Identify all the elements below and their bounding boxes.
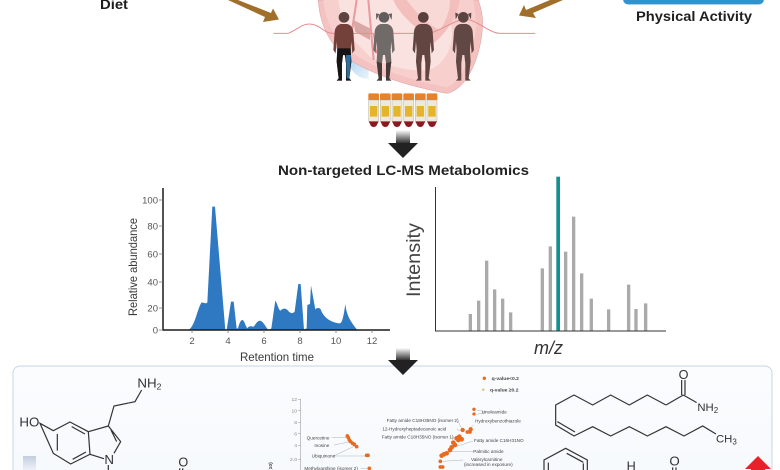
volcano tick labels: 10 bbox=[291, 408, 297, 414]
volcano legend: q-value<0.2 bbox=[492, 376, 519, 382]
spectrum axes bbox=[436, 187, 666, 331]
volcano labels: Valerylcarnitine bbox=[471, 457, 503, 462]
molecule: fatty amide: CH bbox=[716, 434, 732, 446]
heart bbox=[318, 0, 483, 93]
child 4 bbox=[453, 12, 474, 81]
volcano labels: Inosine bbox=[314, 443, 330, 448]
icon: gradient square bbox=[23, 456, 36, 470]
chart: mass spectrum bbox=[404, 177, 666, 358]
molecule: benzene ring fragment: O bbox=[669, 453, 680, 468]
title: Non-targeted LC-MS Metabolomics: Non-targeted LC-MS Metabolomics bbox=[278, 162, 529, 178]
x tick labels: 8 bbox=[297, 336, 303, 347]
volcano tick labels: 8 bbox=[294, 420, 297, 426]
volcano labels: Fatty amide C18H35NO (isomer 1) bbox=[382, 435, 454, 440]
icon: physical activity bar bbox=[623, 0, 764, 4]
volcano labels: Linoleamide bbox=[482, 409, 507, 414]
molecule: fatty amide bbox=[556, 368, 737, 447]
y axis title: Relative abundance bbox=[126, 218, 140, 316]
x tick labels bbox=[189, 336, 377, 347]
chromatogram axes bbox=[163, 188, 390, 330]
volcano labels: Hydroxybenzothiazole bbox=[475, 419, 521, 424]
volcano leader lines bbox=[332, 410, 487, 468]
x axis title: Retention time bbox=[240, 350, 314, 364]
volcano tick labels: 12 bbox=[291, 397, 297, 403]
x axis title: m/z bbox=[534, 338, 563, 358]
volcano tick labels: 6 bbox=[294, 431, 297, 437]
chart: volcano plot bbox=[268, 376, 524, 470]
volcano tick labels bbox=[290, 397, 297, 463]
volcano legend bbox=[482, 376, 519, 393]
y tick labels: 20 bbox=[147, 304, 158, 314]
arrow: diet to children bbox=[228, 0, 279, 22]
volcano labels: Ubiquinone bbox=[312, 454, 336, 459]
y tick labels: 0 bbox=[153, 326, 158, 336]
molecule: fatty amide: 2 bbox=[714, 406, 719, 415]
heading: Physical Activity: Physical Activity bbox=[636, 9, 753, 24]
y tick labels: 80 bbox=[147, 222, 158, 232]
volcano tick labels: 2.0 bbox=[290, 457, 297, 463]
chromatogram peaks bbox=[188, 207, 363, 330]
volcano labels: 12-Hydroxyheptadecanoic acid bbox=[382, 427, 447, 432]
arrow: chart to metabolites bbox=[388, 348, 418, 375]
y tick labels: 100 bbox=[142, 196, 158, 206]
blue patch behind heart bbox=[346, 55, 369, 79]
y axis title: Intensity bbox=[404, 222, 425, 297]
molecule: serotonin: NH bbox=[137, 375, 157, 390]
child 3 bbox=[413, 12, 434, 81]
x tick labels: 12 bbox=[367, 336, 377, 347]
child 1 bbox=[333, 12, 355, 81]
volcano points bbox=[345, 408, 476, 470]
x tick labels: 4 bbox=[225, 336, 231, 347]
molecule: fatty amide: O bbox=[679, 368, 689, 382]
molecule: serotonin: O bbox=[178, 456, 188, 470]
molecule: benzene ring fragment bbox=[544, 448, 680, 470]
arrow: tubes to LC-MS bbox=[388, 130, 418, 158]
illustration: heart with children bbox=[273, 0, 535, 93]
panel: metabolites bbox=[13, 366, 772, 470]
molecule: fatty amide: NH bbox=[697, 402, 714, 414]
volcano labels: Fatty amide C18H35NO (isomer 2) bbox=[387, 418, 459, 423]
y tick labels bbox=[142, 196, 158, 336]
child 2 bbox=[373, 12, 395, 81]
x tick labels: 10 bbox=[331, 336, 341, 347]
molecule: serotonin: N bbox=[104, 452, 114, 467]
ECG line bbox=[273, 19, 535, 53]
icon: sample tubes bbox=[368, 93, 437, 127]
volcano labels: Palmitic amide bbox=[473, 449, 504, 454]
volcano labels: Quercetine bbox=[307, 435, 330, 440]
x tick labels: 6 bbox=[261, 336, 267, 347]
molecule: serotonin bbox=[19, 375, 188, 470]
volcano axis bbox=[298, 399, 301, 470]
volcano labels: Fatty amide C16H31NO bbox=[474, 438, 524, 443]
spectrum bars bbox=[469, 177, 647, 331]
icon: red up arrow bbox=[745, 456, 771, 470]
volcano labels: (increased in exposure) bbox=[464, 462, 513, 467]
y tick labels: 40 bbox=[147, 278, 158, 288]
volcano tick labels: 4 bbox=[294, 443, 297, 449]
molecule: serotonin: HO bbox=[19, 415, 39, 430]
volcano legend: q-value ≥0.2 bbox=[490, 387, 519, 393]
volcano labels bbox=[304, 409, 524, 470]
x tick labels: 2 bbox=[189, 336, 195, 347]
molecule: serotonin: 2 bbox=[157, 381, 162, 391]
y tick labels: 60 bbox=[147, 250, 158, 260]
molecule: fatty amide: 3 bbox=[732, 438, 737, 447]
arrow: physical activity to children bbox=[519, 0, 563, 18]
chart: chromatogram bbox=[126, 188, 390, 364]
